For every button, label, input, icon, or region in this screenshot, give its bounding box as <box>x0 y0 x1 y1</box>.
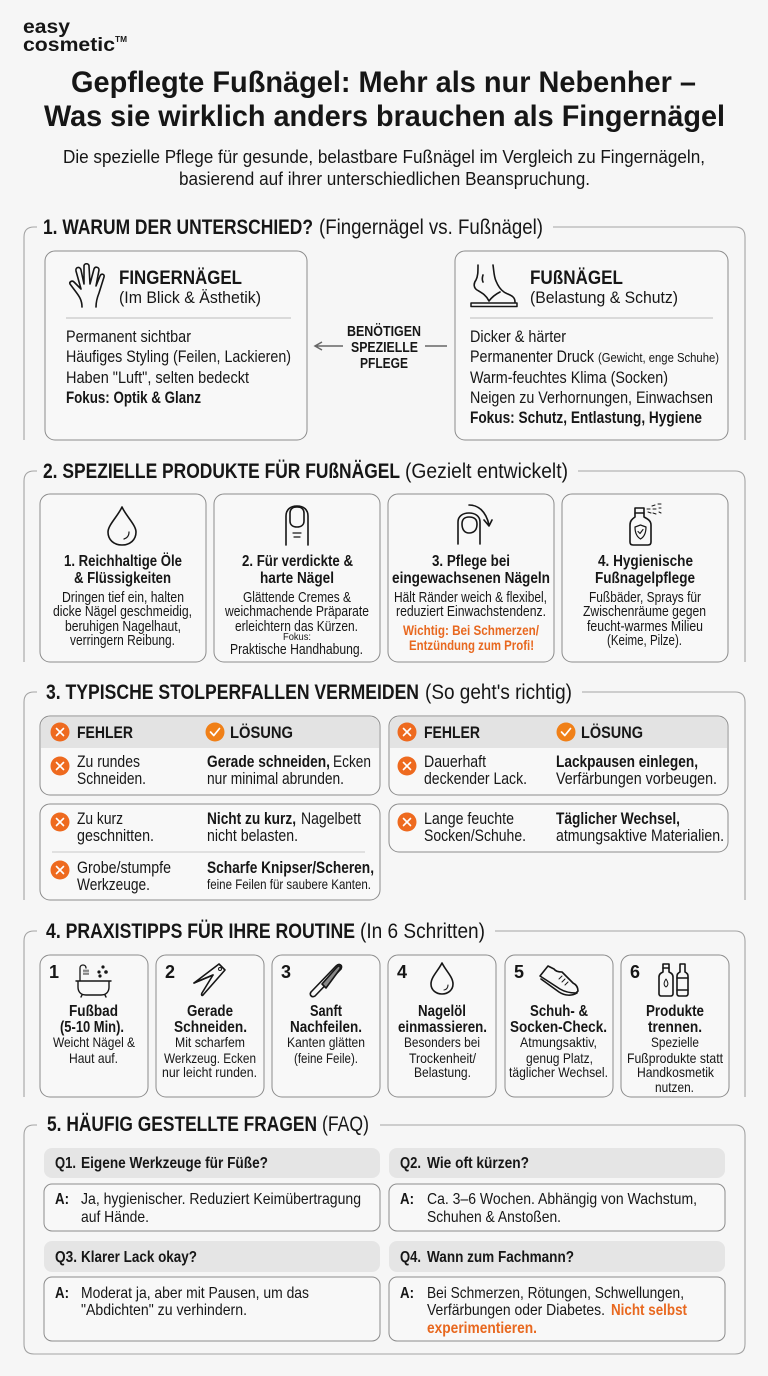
text: Fußnägel list: Warm-feuchtes Klima (Socken) <box>470 369 668 387</box>
table: left top: FEHLER <box>77 723 133 742</box>
table: left bottom: Scharfe Knipser/Scheren, <box>207 859 374 877</box>
step 5: Schuh und Socken: Atmungsaktiv, <box>520 1034 597 1050</box>
step 1: Fußbad <box>40 955 148 1097</box>
card: hygienische Fußnagelpflege: 4. Hygienische <box>598 553 693 570</box>
heading: section 4: 4. PRAXISTIPPS FÜR IHRE ROUTINE <box>46 918 355 943</box>
logo: easy cosmetic <box>23 17 127 56</box>
answer 3: A: <box>55 1285 69 1302</box>
card: eingewachsene Nägel <box>388 494 554 662</box>
answer 4: Bei Schmerzen, Rötungen, Schwellungen, <box>427 1285 684 1302</box>
card: verdickte Nägel: erleichtern das Kürzen. <box>235 619 358 635</box>
step 6: Produkte trennen: trennen. <box>648 1019 702 1036</box>
step 1: Fußbad: (5-10 Min). <box>60 1019 124 1036</box>
step 1: Fußbad: Fußbad <box>69 1003 118 1020</box>
table: right bottom: Lange feuchte <box>424 810 514 828</box>
icon: spray bottle <box>630 504 661 545</box>
card: eingewachsene Nägel: eingewachsenen Nägeln <box>392 570 550 587</box>
heading: section 2: 2. SPEZIELLE PRODUKTE FÜR FUßNÄGEL <box>43 458 400 483</box>
step 2: Gerade Schneiden <box>156 955 264 1097</box>
card: verdickte Nägel: Praktische Handhabung. <box>230 642 363 658</box>
step 4: Nagelöl: Trockenheit/ <box>409 1050 476 1066</box>
answer 2: Ca. 3–6 Wochen. Abhängig von Wachstum, <box>427 1191 697 1208</box>
table: left top: LÖSUNG <box>230 723 293 742</box>
table: left bottom: Zu kurz <box>77 810 123 828</box>
question 1: Eigene Werkzeuge für Füße? <box>81 1155 268 1172</box>
text: Fußnägel list: Fokus: Schutz, Entlastung, Hygiene <box>470 409 702 427</box>
heading: section 1: 1. WARUM DER UNTERSCHIED? <box>43 215 313 239</box>
question 3: Q3. <box>55 1249 77 1266</box>
card: hygienische Fußnagelpflege: Zwischenräume gegen <box>583 604 706 620</box>
step 5: Schuh und Socken: Schuh- & <box>530 1003 588 1020</box>
panel: 1. Warum der Unterschied <box>24 215 745 440</box>
answer 1: Ja, hygienischer. Reduziert Keimübertragung <box>81 1191 361 1208</box>
table: left top: Zu rundes <box>77 753 140 771</box>
heading: section 1: (Fingernägel vs. Fußnägel) <box>319 215 543 239</box>
answer 4: A: <box>400 1285 414 1302</box>
step 6: Produkte trennen: nutzen. <box>655 1079 694 1095</box>
answer 4 <box>389 1277 725 1341</box>
icon: nail clipper <box>194 964 225 995</box>
text: Fußnägel list: Neigen zu Verhornungen, Einwachsen <box>470 389 713 407</box>
heading: Fingernägel: (Im Blick & Ästhetik) <box>119 288 261 307</box>
card: eingewachsene Nägel: Entzündung zum Profi! <box>409 637 534 653</box>
table: left top: nur minimal abrunden. <box>207 770 344 788</box>
card: Reichhaltige Öle: 1. Reichhaltige Öle <box>64 551 182 570</box>
table: left top <box>40 716 380 795</box>
card: Reichhaltige Öle: Dringen tief ein, halten <box>62 590 184 606</box>
step 3: Sanft Nachfeilen: Sanft <box>310 1003 343 1020</box>
card: Fingernägel <box>45 251 307 440</box>
table: right top: FEHLER <box>424 723 480 742</box>
icon: hand <box>70 264 104 307</box>
arrow and label: benötigen spezielle Pflege <box>315 323 447 372</box>
step 3: Sanft Nachfeilen: 3 <box>281 962 291 982</box>
icon: nail with arrow <box>458 505 492 544</box>
answer 2 <box>389 1184 725 1231</box>
step 6: Produkte trennen: Spezielle <box>651 1034 699 1050</box>
table: right top <box>389 716 728 795</box>
step 2: Gerade Schneiden: 2 <box>165 962 175 982</box>
answer 1: A: <box>55 1191 69 1208</box>
card: Reichhaltige Öle: & Flüssigkeiten <box>74 570 171 587</box>
card: verdickte Nägel <box>214 494 380 662</box>
text: Fußnägel list: Dicker & härter <box>470 328 566 346</box>
card: Reichhaltige Öle: dicke Nägel geschmeidig, <box>53 604 192 620</box>
subtitle <box>63 147 705 189</box>
icon: error <box>50 756 70 776</box>
card: Reichhaltige Öle: beruhigen Nagelhaut, <box>65 619 181 635</box>
table: left top: Schneiden. <box>77 770 146 788</box>
heading: section 5: 5. HÄUFIG GESTELLTE FRAGEN <box>47 1112 317 1136</box>
step 6: Produkte trennen: 6 <box>630 962 640 982</box>
question 4: Q4. <box>400 1249 421 1266</box>
question 2: Q2. <box>400 1155 421 1172</box>
subtitle: Die spezielle Pflege für gesunde, belastbare Fußnägel im Vergleich zu Fingernägeln, <box>63 147 705 167</box>
table: left bottom: geschnitten. <box>77 827 154 845</box>
heading: section 1 <box>43 215 543 239</box>
step 6: Produkte trennen: Handkosmetik <box>637 1064 715 1080</box>
step 5: Schuh und Socken: 5 <box>514 962 524 982</box>
step 3: Sanft Nachfeilen: (feine Feile). <box>294 1050 358 1066</box>
step 1: Fußbad: Weicht Nägel & <box>53 1034 136 1050</box>
card: hygienische Fußnagelpflege: (Keime, Pilze). <box>607 633 682 649</box>
answer 3: "Abdichten" zu verhindern. <box>81 1302 247 1319</box>
step 4: Nagelöl: Nagelöl <box>418 1003 466 1020</box>
step 3: Sanft Nachfeilen <box>272 955 380 1097</box>
card: verdickte Nägel: weichmachende Präparate <box>224 604 369 620</box>
heading: Fußnägel <box>530 268 678 307</box>
table: right bottom: Täglicher Wechsel, <box>556 810 680 828</box>
question 2 <box>389 1148 725 1178</box>
step 5: Schuh und Socken: Socken-Check. <box>510 1019 607 1036</box>
answer 2: A: <box>400 1191 414 1208</box>
heading: Fußnägel: FUßNÄGEL <box>530 268 623 289</box>
icon: error row 2 <box>50 812 70 832</box>
table: right bottom: atmungsaktive Materialien. <box>556 827 724 845</box>
icon: shoe <box>540 966 578 995</box>
table: left bottom: feine Feilen für saubere Kanten. <box>207 876 371 892</box>
step 1: Fußbad: 1 <box>49 962 59 982</box>
icon: solution header <box>206 722 224 742</box>
title: Gepflegte Fußnägel: Mehr als nur Nebenher – <box>71 66 696 99</box>
step 4: Nagelöl: einmassieren. <box>398 1019 487 1036</box>
question 3: Klarer Lack okay? <box>81 1249 197 1266</box>
step 2: Gerade Schneiden: Gerade <box>187 1003 233 1020</box>
heading: section 3: (So geht's richtig) <box>425 680 572 704</box>
icon: error header right <box>398 722 416 742</box>
panel: 5. FAQ <box>24 1112 745 1354</box>
title: Was sie wirklich anders brauchen als Fingernägel <box>44 100 725 133</box>
icon: error row 3 <box>50 860 70 880</box>
step 4: Nagelöl <box>388 955 496 1097</box>
step 5: Schuh und Socken <box>505 955 613 1097</box>
step 6: Produkte trennen: Produkte <box>646 1003 704 1020</box>
step 4: Nagelöl: 4 <box>397 962 407 982</box>
text: Fingernägel list <box>66 328 291 407</box>
step 5: Schuh und Socken: genug Platz, <box>526 1050 593 1066</box>
answer 4: Verfärbungen oder Diabetes. <box>427 1302 605 1319</box>
card: verdickte Nägel: harte Nägel <box>260 570 334 587</box>
card: verdickte Nägel: 2. Für verdickte & <box>242 553 353 570</box>
question 2: Wie oft kürzen? <box>427 1155 529 1172</box>
icon: bathtub <box>76 965 111 997</box>
table: left bottom: Grobe/stumpfe <box>77 859 171 877</box>
panel: 2. Spezielle Produkte <box>24 458 745 662</box>
answer 1: auf Hände. <box>81 1209 149 1226</box>
text: Fingernägel list: Haben "Luft", selten bedeckt <box>66 369 249 387</box>
heading: section 2: (Gezielt entwickelt) <box>405 459 568 483</box>
step 1: Fußbad: Haut auf. <box>69 1050 118 1066</box>
heading: Fingernägel: FINGERNÄGEL <box>119 268 242 289</box>
heading: Fußnägel: (Belastung & Schutz) <box>530 288 678 307</box>
answer 4: Nicht selbst <box>611 1302 688 1319</box>
question 1: Q1. <box>55 1155 76 1172</box>
step 6: Produkte trennen <box>621 955 729 1097</box>
card: eingewachsene Nägel: reduziert Einwachstendenz. <box>396 604 546 620</box>
card: hygienische Fußnagelpflege <box>562 494 728 662</box>
table: right top: Verfärbungen vorbeugen. <box>556 770 717 788</box>
step 5: Schuh und Socken: täglicher Wechsel. <box>509 1064 608 1080</box>
table: right top: Lackpausen einlegen, <box>556 753 698 771</box>
heading: section 5: (FAQ) <box>322 1112 369 1136</box>
logo: easy cosmetic: cosmetic <box>23 35 115 56</box>
arrow and label: benötigen spezielle Pflege: SPEZIELLE <box>351 340 418 356</box>
step 4: Nagelöl: Belastung. <box>414 1064 471 1080</box>
arrow and label: benötigen spezielle Pflege: BENÖTIGEN <box>347 323 421 340</box>
arrow and label: benötigen spezielle Pflege: PFLEGE <box>360 356 408 372</box>
icon: drop <box>431 963 453 994</box>
table: right bottom <box>389 804 728 852</box>
table: left bottom <box>40 804 380 900</box>
icon: foot on sandal <box>471 265 517 306</box>
icon: error row right <box>398 812 416 832</box>
question 4: Wann zum Fachmann? <box>427 1249 574 1266</box>
card: eingewachsene Nägel: Wichtig: Bei Schmerzen/ <box>403 622 539 638</box>
heading: section 4: (In 6 Schritten) <box>360 919 485 943</box>
text: Fingernägel list: Fokus: Optik & Glanz <box>66 389 201 407</box>
step 2: Gerade Schneiden: nur leicht runden. <box>162 1064 257 1080</box>
title <box>44 66 725 133</box>
step 2: Gerade Schneiden: Mit scharfem <box>175 1034 245 1050</box>
text: Fingernägel list: Häufiges Styling (Feilen, Lackieren) <box>66 348 291 366</box>
table: left bottom: nicht belasten. <box>207 827 298 845</box>
text: Fußnägel list <box>470 328 719 427</box>
icon: error header <box>50 722 70 742</box>
card: hygienische Fußnagelpflege: Fußnagelpflege <box>595 570 695 587</box>
logo: easy cosmetic: easy <box>23 17 70 38</box>
card: Reichhaltige Öle: verringern Reibung. <box>70 633 175 649</box>
question 4 <box>389 1241 725 1272</box>
step 3: Sanft Nachfeilen: Kanten glätten <box>287 1034 365 1050</box>
table: left bottom: Werkzeuge. <box>77 876 150 894</box>
card: Fußnägel <box>455 251 728 440</box>
text: Fußnägel list: (Gewicht, enge Schuhe) <box>598 350 719 365</box>
card: eingewachsene Nägel: 3. Pflege bei <box>432 553 510 570</box>
text: Fußnägel list: Permanenter Druck <box>470 348 595 366</box>
step 6: Produkte trennen: Fußprodukte statt <box>627 1050 723 1066</box>
panel: 3. Stolperfallen <box>24 680 745 900</box>
subtitle: basierend auf ihrer unterschiedlichen Beanspruchung. <box>179 169 590 189</box>
icon: nail file <box>310 965 342 997</box>
panel: 4. Praxistipps <box>24 918 745 1097</box>
card: verdickte Nägel: Glättende Cremes & <box>243 590 351 606</box>
step 2: Gerade Schneiden: Schneiden. <box>174 1019 247 1036</box>
logo: easy cosmetic: TM <box>115 35 127 44</box>
question 1 <box>44 1148 380 1178</box>
step 2: Gerade Schneiden: Werkzeug. Ecken <box>164 1050 256 1066</box>
icon: error right <box>398 756 416 776</box>
table: left top: Ecken <box>333 753 371 771</box>
card: verdickte Nägel: Fokus: <box>283 632 311 643</box>
answer 2: Schuhen & Anstoßen. <box>427 1209 561 1226</box>
table: right top: LÖSUNG <box>581 723 643 742</box>
answer 1 <box>44 1184 380 1231</box>
table: right bottom: Socken/Schuhe. <box>424 827 526 845</box>
table: left bottom: Nagelbett <box>301 810 361 828</box>
icon: oil drop <box>108 507 136 545</box>
answer 3 <box>44 1277 380 1341</box>
card: eingewachsene Nägel: Hält Ränder weich & flexibel, <box>394 590 547 606</box>
card: Reichhaltige Öle <box>40 494 206 662</box>
table: left top: Gerade schneiden, <box>207 753 330 771</box>
question 3 <box>44 1241 380 1272</box>
step 4: Nagelöl: Besonders bei <box>404 1034 480 1050</box>
icon: solution header right <box>556 722 576 742</box>
icon: two bottles <box>659 964 688 996</box>
table: right top: deckender Lack. <box>424 770 527 788</box>
answer 3: Moderat ja, aber mit Pausen, um das <box>81 1285 309 1302</box>
answer 4: experimentieren. <box>427 1320 537 1337</box>
card: hygienische Fußnagelpflege: Fußbäder, Sprays für <box>589 590 701 606</box>
table: right top: Dauerhaft <box>424 753 486 771</box>
card: hygienische Fußnagelpflege: feucht-warmes Milieu <box>587 619 703 635</box>
icon: finger nail <box>286 506 308 545</box>
text: Fingernägel list: Permanent sichtbar <box>66 328 191 346</box>
step 3: Sanft Nachfeilen: Nachfeilen. <box>290 1019 362 1036</box>
heading: section 3: 3. TYPISCHE STOLPERFALLEN VERMEIDEN <box>46 680 419 704</box>
table: left bottom: Nicht zu kurz, <box>207 810 296 828</box>
heading: Fingernägel <box>119 268 261 307</box>
